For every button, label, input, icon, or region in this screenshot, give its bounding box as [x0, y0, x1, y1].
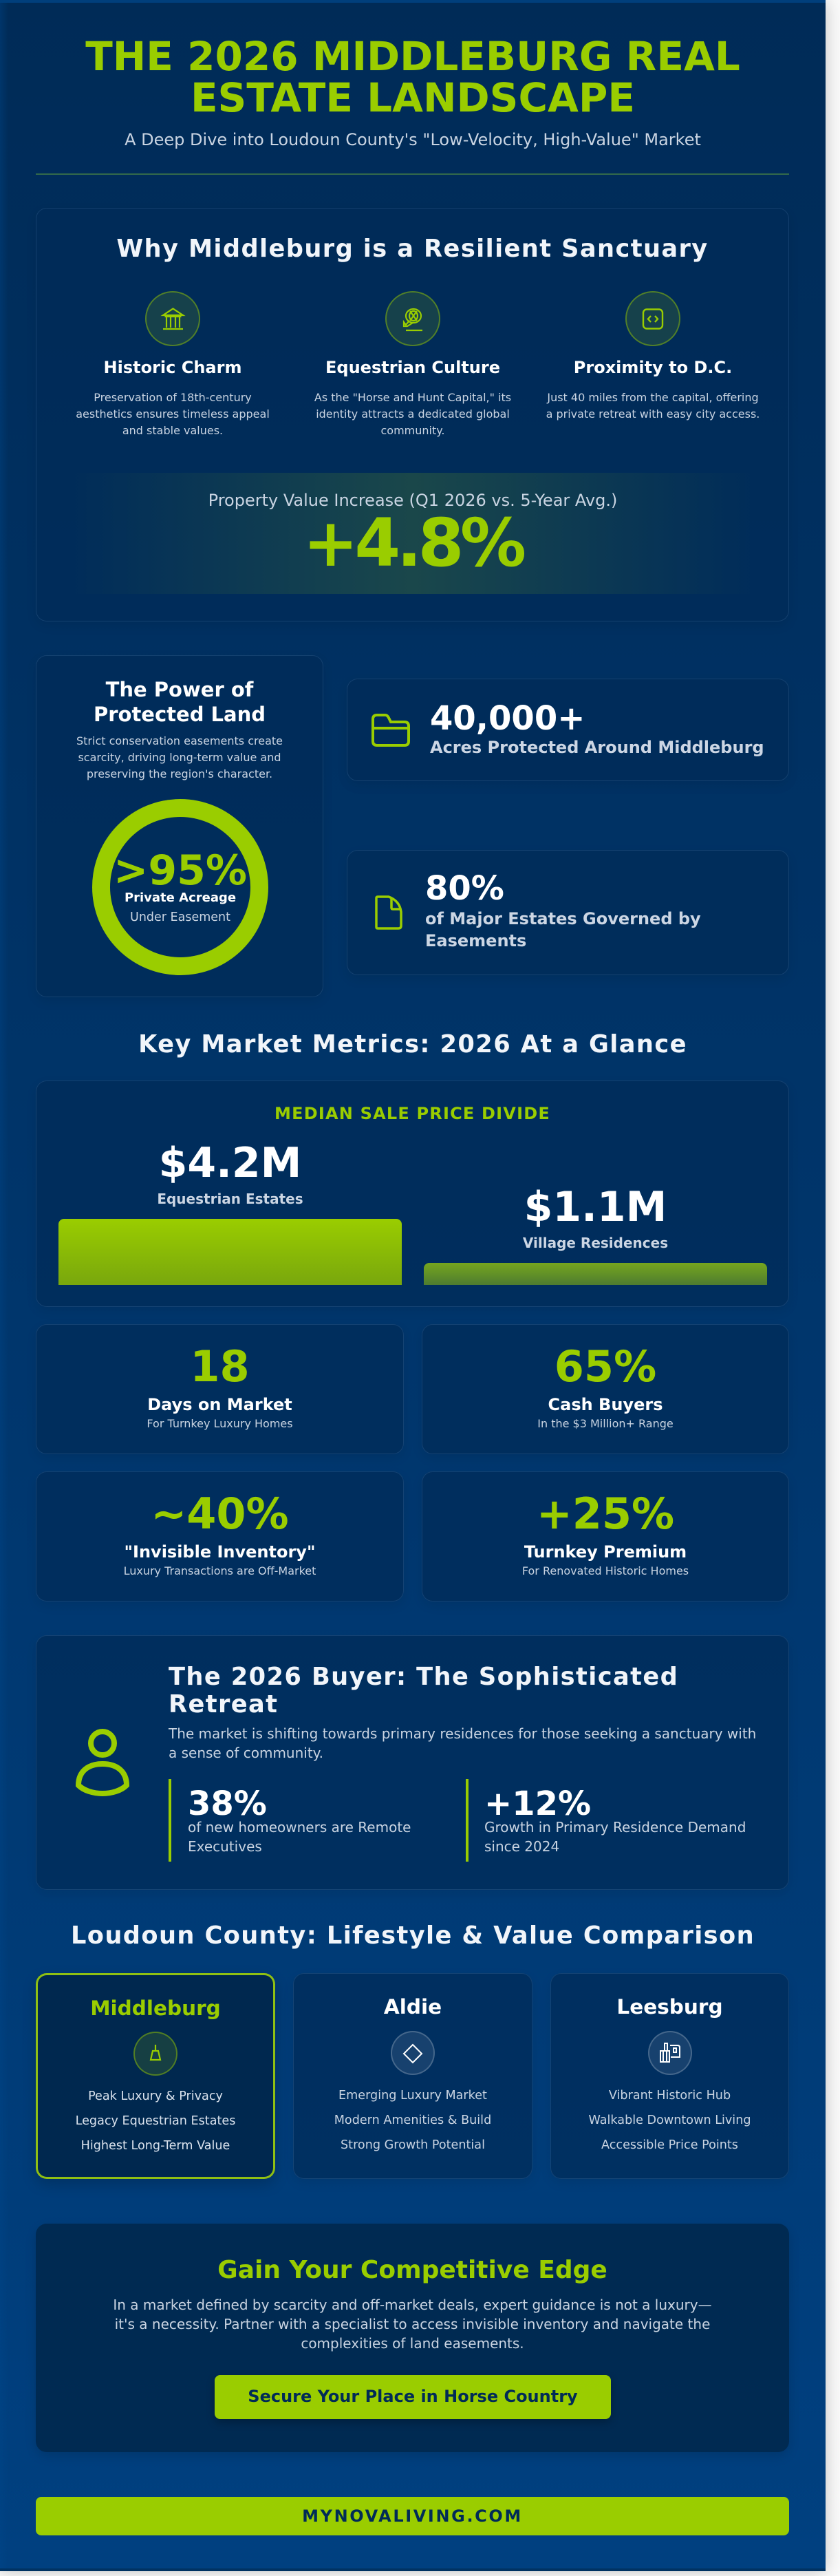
title	[85, 33, 740, 121]
heading: The 2026 Buyer: The Sophisticated	[169, 1663, 678, 1691]
stat text: of new homeowners are Remote	[188, 1819, 411, 1835]
feature text: As the "Horse and Hunt Capital," its	[314, 391, 511, 404]
heading: Protected Land	[94, 703, 266, 726]
metric note: For Turnkey Luxury Homes	[147, 1417, 293, 1430]
subtitle: A Deep Dive into Loudoun County's "Low-Velocity, High-Value" Market	[125, 130, 701, 149]
metric label: Turnkey Premium	[524, 1542, 687, 1562]
description	[168, 1725, 756, 1761]
description: a sense of community.	[169, 1745, 323, 1761]
feature title: Equestrian Culture	[325, 358, 500, 377]
icon: person	[76, 1729, 129, 1796]
footer bar	[36, 2497, 789, 2535]
stat label: Easements	[425, 931, 526, 950]
CTA button: Secure Your Place in Horse Country	[248, 2387, 578, 2406]
card list: Highest Long-Term Value	[81, 2139, 230, 2153]
metric label: Days on Market	[147, 1395, 292, 1414]
card list: Strong Growth Potential	[341, 2138, 485, 2152]
stat number: 80%	[425, 869, 504, 908]
feature text	[76, 391, 270, 437]
donut value: >95%	[114, 847, 247, 895]
description: The market is shifting towards primary residences for those seeking a sanctuary with	[169, 1725, 756, 1742]
heading	[169, 1663, 678, 1718]
feature: equestrian culture	[314, 291, 511, 437]
section heading: lifestyle and value comparison: Loudoun County: Lifestyle & Value Comparison	[71, 1922, 755, 1950]
card list: Walkable Downtown Living	[588, 2114, 751, 2127]
panel: the 2026 buyer	[36, 1635, 789, 1890]
bar value: $4.2M	[159, 1139, 301, 1187]
chart title: MEDIAN SALE PRICE DIVIDE	[274, 1104, 550, 1123]
metric card: turnkey premium	[422, 1471, 789, 1601]
feature text: and stable values.	[122, 424, 223, 437]
card title: Leesburg	[616, 1995, 723, 2019]
feature text: Preservation of 18th-century	[94, 391, 252, 404]
feature text: community.	[380, 424, 445, 437]
stat number: 38%	[188, 1785, 267, 1823]
description	[76, 734, 283, 780]
bar	[424, 1263, 767, 1285]
CTA text: In a market defined by scarcity and off-market deals, expert guidance is not a luxury—	[113, 2297, 712, 2313]
heading: Retreat	[169, 1690, 278, 1718]
panel: power of protected land	[36, 655, 323, 997]
card list: Accessible Price Points	[601, 2138, 738, 2152]
comparison card: Leesburg	[550, 1973, 789, 2179]
card list	[76, 2089, 235, 2153]
CTA text: it's a necessity. Partner with a specialist to access invisible inventory and navigate the	[115, 2316, 710, 2332]
panel: acres stat	[347, 679, 789, 781]
icon: buildings	[648, 2031, 692, 2075]
callout label: Property Value Increase (Q1 2026 vs. 5-Year Avg.)	[208, 491, 617, 510]
metric card: days on market	[36, 1324, 404, 1454]
metric value: 65%	[554, 1341, 656, 1392]
feature title: Historic Charm	[104, 358, 241, 377]
icon: bell	[133, 2032, 177, 2076]
panel: easements stat	[347, 850, 789, 975]
panel: call to action	[36, 2224, 789, 2452]
bar	[58, 1219, 402, 1285]
CTA button	[215, 2375, 611, 2419]
icon: horse	[385, 291, 440, 346]
donut chart: 95%	[92, 799, 268, 975]
section heading: key market metrics: Key Market Metrics: 2026 At a Glance	[138, 1030, 687, 1058]
title: THE 2026 MIDDLEBURG REAL	[85, 33, 740, 80]
metric value: 18	[190, 1341, 250, 1392]
icon: diamond	[391, 2031, 435, 2075]
card list: Emerging Luxury Market	[338, 2089, 487, 2103]
stat label: Acres Protected Around Middleburg	[430, 738, 764, 757]
bar group: equestrian estates	[58, 1139, 402, 1285]
card list	[588, 2089, 751, 2152]
heading	[94, 678, 266, 726]
comparison card: Aldie	[293, 1973, 532, 2179]
donut sublabel: Under Easement	[130, 911, 230, 924]
stat label	[425, 909, 701, 950]
stat text: Growth in Primary Residence Demand	[484, 1819, 746, 1835]
bar label: Equestrian Estates	[157, 1191, 303, 1207]
metric note: In the $3 Million+ Range	[537, 1417, 674, 1430]
heading: The Power of	[106, 678, 253, 701]
card list	[334, 2089, 491, 2152]
stat label: of Major Estates Governed by	[425, 909, 701, 928]
panel: median sale price bar chart	[36, 1081, 789, 1307]
icon: bank building	[145, 291, 200, 346]
CTA text	[113, 2297, 712, 2352]
metric label: Cash Buyers	[548, 1395, 663, 1414]
stat text: Executives	[188, 1838, 262, 1855]
feature title: Proximity to D.C.	[574, 358, 732, 377]
stat number: +12%	[484, 1785, 591, 1823]
metric card: invisible inventory	[36, 1471, 404, 1601]
header divider	[36, 173, 789, 175]
feature text: a private retreat with easy city access.	[546, 407, 760, 421]
icon: folder	[371, 714, 410, 747]
buyer stat: remote executives	[169, 1779, 444, 1862]
icon: code frame	[625, 291, 680, 346]
stat number: 40,000+	[430, 699, 585, 738]
description: preserving the region's character.	[87, 767, 272, 780]
card list: Vibrant Historic Hub	[609, 2089, 731, 2103]
header	[36, 33, 789, 175]
bar group: village residences	[424, 1183, 767, 1285]
icon: document	[375, 895, 402, 930]
stat text	[188, 1819, 411, 1855]
card title: Aldie	[384, 1995, 442, 2019]
footer bar: MYNOVALIVING.COM	[302, 2506, 523, 2526]
donut label: Private Acreage	[125, 891, 236, 905]
feature: historic charm	[76, 291, 270, 437]
card list: Peak Luxury & Privacy	[88, 2089, 223, 2103]
metric note: Luxury Transactions are Off-Market	[124, 1564, 316, 1577]
bar value: $1.1M	[524, 1183, 667, 1231]
feature text: Just 40 miles from the capital, offering	[547, 391, 759, 404]
panel: why Middleburg is a resilient sanctuary	[36, 208, 789, 621]
title: ESTATE LANDSCAPE	[191, 74, 635, 121]
property value callout	[69, 473, 757, 594]
feature text	[314, 391, 511, 437]
bar label: Village Residences	[523, 1235, 668, 1251]
comparison card: Middleburg	[36, 1973, 275, 2179]
feature text: aesthetics ensures timeless appeal	[76, 407, 270, 421]
description: scarcity, driving long-term value and	[78, 751, 281, 764]
description: Strict conservation easements create	[76, 734, 283, 747]
heading: Why Middleburg is a Resilient Sanctuary	[116, 235, 709, 263]
buyer stat: primary residence demand	[466, 1779, 768, 1862]
CTA text: complexities of land easements.	[301, 2335, 524, 2352]
feature text	[546, 391, 760, 421]
callout number: +4.8%	[303, 504, 523, 582]
feature: proximity to D.C.	[546, 291, 760, 421]
metric note: For Renovated Historic Homes	[522, 1564, 689, 1577]
card list: Modern Amenities & Build	[334, 2114, 491, 2127]
feature text: identity attracts a dedicated global	[316, 407, 510, 421]
metric label: "Invisible Inventory"	[125, 1542, 315, 1562]
card title: Middleburg	[90, 1997, 221, 2020]
metric value: +25%	[537, 1489, 674, 1539]
stat text: since 2024	[484, 1838, 559, 1855]
card list: Legacy Equestrian Estates	[76, 2114, 235, 2128]
metric value: ~40%	[151, 1489, 289, 1539]
metric card: cash buyers	[422, 1324, 789, 1454]
stat text	[484, 1819, 746, 1855]
CTA heading: Gain Your Competitive Edge	[217, 2256, 607, 2284]
